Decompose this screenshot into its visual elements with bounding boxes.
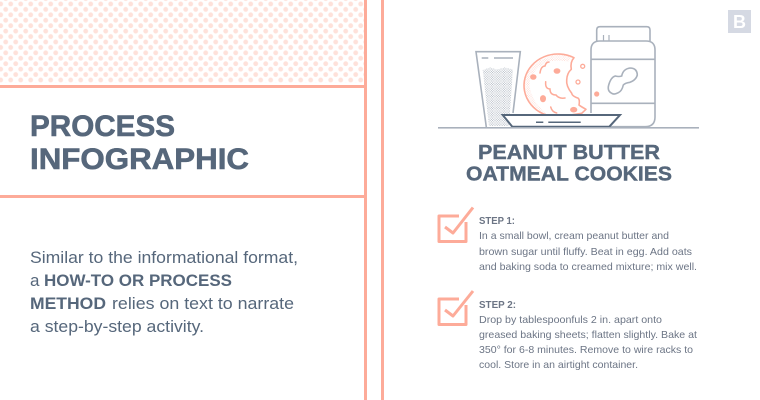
text block: description: HOW-TO OR PROCESS (44, 271, 232, 290)
text block: description (30, 248, 298, 336)
icon: checkbox step 2 (439, 291, 473, 324)
text block: step 1: and baking soda to creamed mixture; mix well. (479, 262, 697, 273)
text block: step 2: Drop by tablespoonfuls 2 in. apart onto (479, 315, 662, 326)
title: PROCESS (30, 110, 175, 143)
text block: description: METHOD (30, 294, 106, 313)
heading: recipe name: PEANUT BUTTER (478, 141, 660, 164)
icon: brand logo badge: B (733, 12, 746, 32)
illustration: milk, cookie, peanut butter jar and plate (438, 27, 699, 129)
icon: bitten cookie (524, 54, 599, 117)
icon: checkbox step 1 (439, 208, 473, 242)
text block: description: a (30, 271, 40, 290)
text block: description: a step-by-step activity. (30, 317, 204, 336)
text block: description: relies on text to narrate (112, 294, 294, 313)
text block: step 2: greased baking sheets; flatten slightly. Bake at (479, 330, 697, 341)
text block: step 1 (479, 216, 697, 273)
panel divider: thick vertical rule (364, 0, 367, 400)
panel divider: second vertical rule (381, 0, 384, 400)
icon: peanut butter jar (591, 27, 655, 127)
text block: step 2: 350° for 6-8 minutes. Remove to wire racks to (479, 345, 693, 356)
title (30, 110, 249, 176)
text block: step 1: brown sugar until fluffy. Beat in egg. Add oats (479, 247, 692, 258)
text block: step 2: cool. Store in an airtight container. (479, 360, 638, 371)
panel divider: horizontal rule top of title (0, 85, 364, 88)
text block: step 2 (479, 300, 697, 371)
text block: step 1: In a small bowl, cream peanut butter and (479, 231, 669, 242)
table line (438, 127, 699, 129)
text block: step 1: STEP 1: (479, 216, 515, 227)
icon: glass of milk (476, 52, 520, 127)
heading: recipe name (466, 141, 672, 186)
panel: dotted header pattern (0, 0, 364, 83)
text block: description: Similar to the informational format, (30, 248, 298, 267)
icon: plate (503, 115, 620, 127)
heading: recipe name: OATMEAL COOKIES (466, 162, 672, 186)
icon: brand logo badge (728, 10, 751, 33)
title: INFOGRAPHIC (30, 143, 249, 176)
text block: step 2: STEP 2: (479, 300, 516, 311)
panel divider: horizontal rule bottom of title (0, 195, 364, 198)
